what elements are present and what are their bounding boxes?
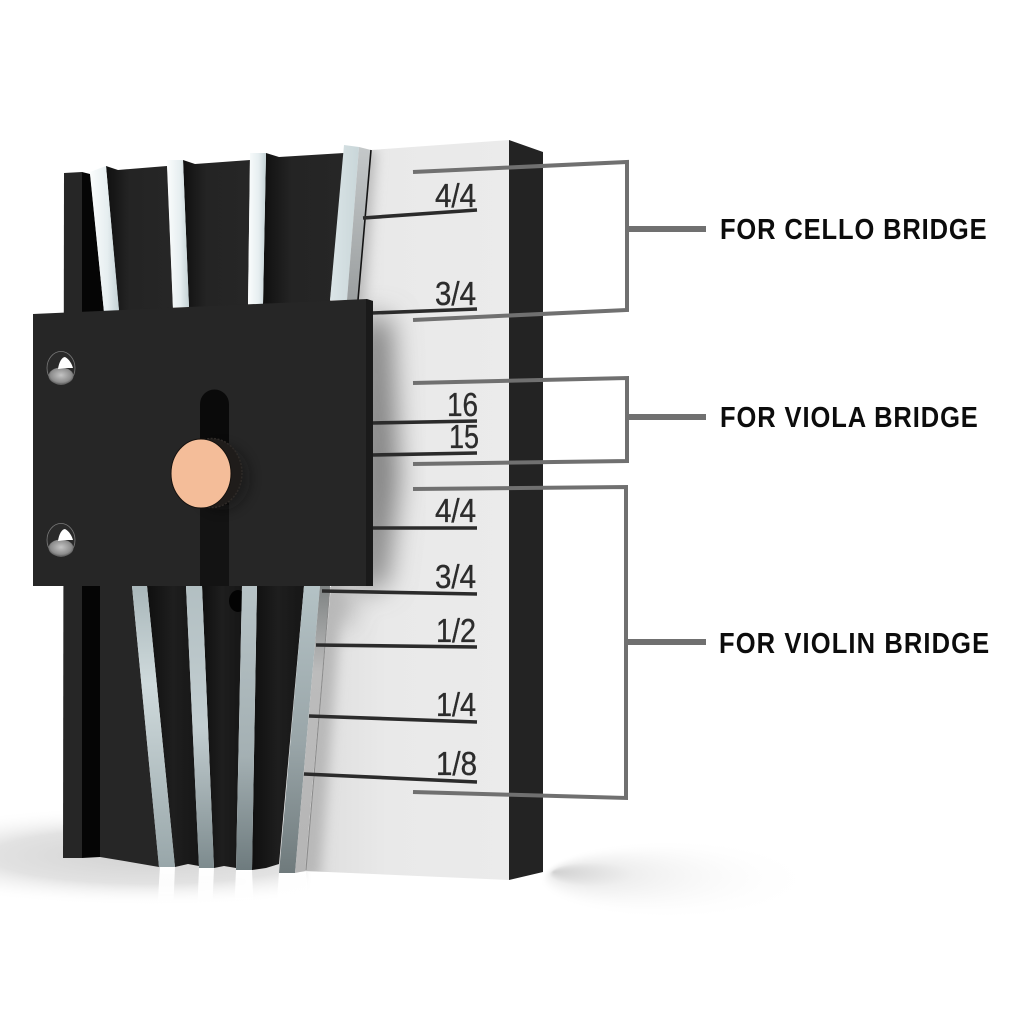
- left rail: [63, 172, 82, 858]
- back wall lower segments: [147, 586, 304, 870]
- floor shadow: [0, 806, 820, 920]
- scale numbers: [435, 177, 479, 782]
- scale numbers: 4/4: [435, 177, 476, 214]
- bracket: viola: [413, 378, 706, 464]
- lower slat 1: [132, 586, 175, 867]
- upper slat 1: [90, 166, 119, 312]
- upper slat 4: [330, 145, 359, 300]
- sliding plate: [33, 299, 373, 586]
- tick lines: [304, 210, 477, 782]
- label: viola: FOR VIOLA BRIDGE: [720, 400, 978, 433]
- scale numbers: 15: [449, 418, 479, 455]
- lower slat 2: [186, 586, 214, 868]
- screw bottom: [47, 524, 75, 556]
- bracket: violin: [413, 487, 706, 798]
- scale numbers: 16: [447, 386, 478, 423]
- knob knurled back: [182, 438, 242, 508]
- scale numbers: 1/4: [436, 686, 476, 723]
- slat reflections: [157, 866, 510, 926]
- scale numbers: 4/4: [435, 492, 476, 529]
- bracket: cello: [413, 162, 706, 320]
- back wall lower left: [100, 586, 159, 867]
- upper slat 2: [167, 160, 189, 307]
- back wall upper segments: [106, 153, 344, 312]
- scale numbers: 1/8: [436, 745, 477, 782]
- lower slat 4: [279, 586, 320, 873]
- lower panel edge line: [306, 587, 330, 870]
- scale numbers: 3/4: [435, 275, 476, 312]
- upper slat 4 side: [347, 147, 371, 300]
- label: cello: FOR CELLO BRIDGE: [720, 212, 987, 245]
- dark channel: [82, 172, 104, 858]
- slot lower shade: [200, 505, 229, 586]
- knob shadow: [194, 446, 250, 510]
- panel black side face: [509, 140, 543, 880]
- bridge template device: [33, 140, 543, 880]
- copper knob: [171, 439, 231, 508]
- panel edge line: [358, 150, 371, 300]
- infographic canvas: [0, 140, 988, 896]
- scale numbers: 1/2: [436, 612, 476, 649]
- lower slat 4 side: [295, 586, 330, 873]
- hole: [229, 590, 247, 612]
- scale numbers: 3/4: [435, 558, 476, 595]
- lower slat 3: [236, 586, 257, 870]
- screw top: [47, 352, 75, 384]
- scale panel: [296, 140, 509, 880]
- upper slat 3: [248, 153, 266, 304]
- slot: [200, 390, 229, 586]
- label: violin: FOR VIOLIN BRIDGE: [719, 626, 989, 659]
